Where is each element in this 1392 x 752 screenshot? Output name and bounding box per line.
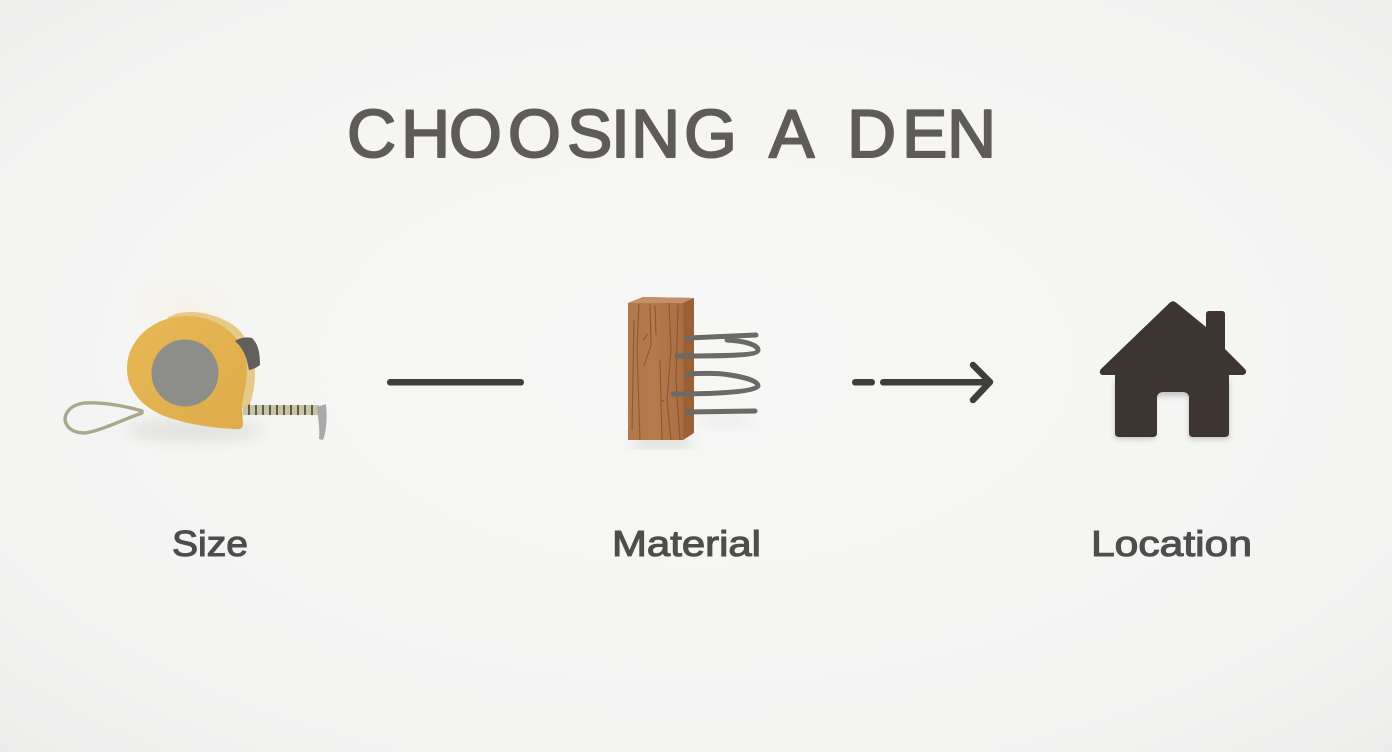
icon: tape measure <box>65 293 327 441</box>
title: CHOOSING A DEN <box>347 96 996 172</box>
label: size: Size <box>172 523 248 564</box>
icon: wood block with spring <box>628 297 758 446</box>
block side and top <box>628 297 694 440</box>
connector line <box>387 379 524 386</box>
steel spring <box>673 335 758 412</box>
block front <box>628 303 684 440</box>
strap loop <box>65 403 142 433</box>
label: material: Material <box>612 523 761 564</box>
tape blade <box>243 404 327 440</box>
lock button <box>235 337 260 370</box>
icon: house <box>1100 301 1246 439</box>
case back edge <box>167 312 255 408</box>
wood grain <box>632 303 680 440</box>
grey window <box>152 340 218 406</box>
case front <box>127 316 247 429</box>
label: location: Location <box>1091 523 1252 564</box>
arrow <box>852 365 990 400</box>
